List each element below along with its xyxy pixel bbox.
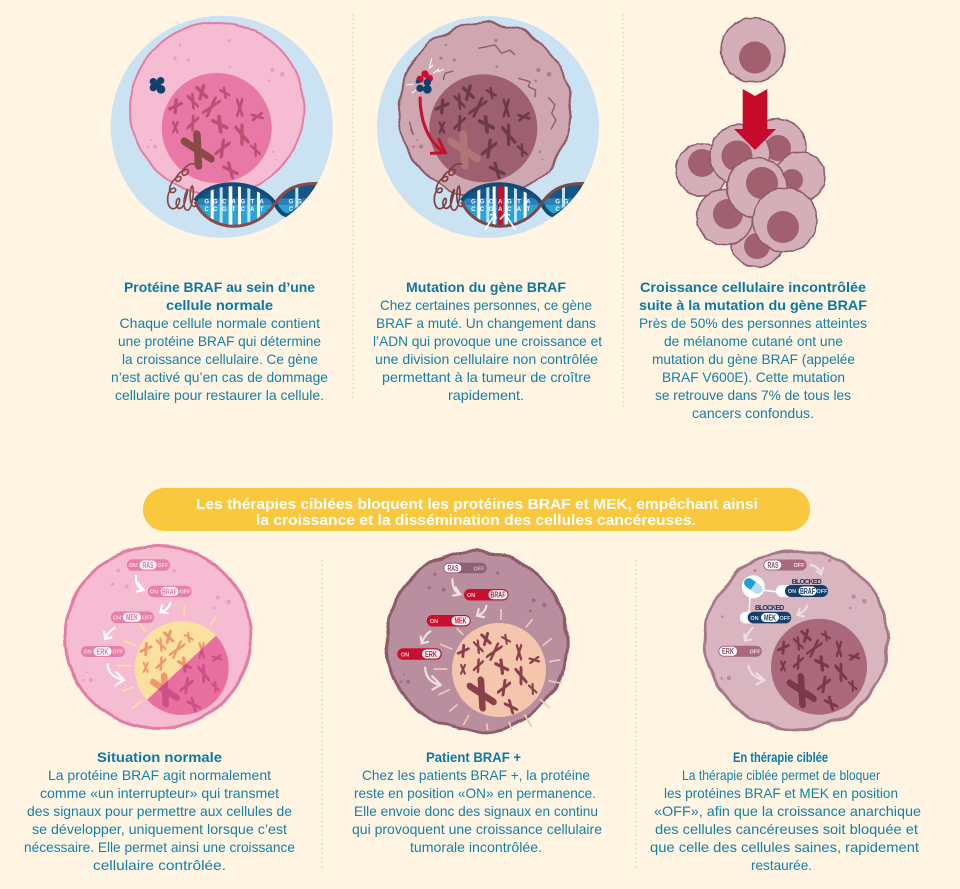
- DNA helix with mutation: C: [489, 200, 494, 206]
- text: targeted therapy: les protéines BRAF et MEK en position: [664, 785, 898, 801]
- DNA helix with mutation: G: [489, 207, 494, 213]
- DNA helix with mutation: G: [555, 200, 560, 206]
- text: uncontrolled growth: suite à la mutation du gène BRAF: [639, 297, 867, 313]
- toggle: MEK blocked: ON: [750, 616, 759, 622]
- toggle: MEK on: ON: [430, 619, 438, 625]
- cell body: [65, 546, 251, 728]
- text: BRAF gene mutation: [373, 279, 602, 403]
- DNA helix: A: [259, 200, 264, 206]
- text: uncontrolled growth: Croissance cellulaire incontrôlée: [640, 279, 866, 295]
- text: uncontrolled growth: Près de 50% des personnes atteintes: [639, 315, 867, 331]
- toggle: RAS: OFF: [158, 563, 169, 569]
- toggle: ERK on: ERK: [425, 650, 437, 659]
- toggle: RAS: [127, 559, 170, 571]
- mutated cell: [399, 23, 571, 197]
- toggle: BRAF on: ON: [467, 593, 475, 599]
- text: normal BRAF protein: cellule normale: [166, 297, 273, 313]
- text: normal BRAF protein: n’est activé qu’en cas de dommage: [111, 369, 328, 385]
- panel: BRAF mutation cell illustration: [377, 16, 599, 238]
- text: targeted therapy: des cellules cancéreuses soit bloquée et: [655, 821, 918, 837]
- toggle: ERK: ON: [83, 650, 92, 656]
- signal rays: [433, 609, 562, 730]
- text: BRAF positive patient: [352, 749, 602, 855]
- DNA helix with mutation: A: [498, 200, 503, 206]
- text: normal BRAF protein: Chaque cellule normale contient: [120, 315, 320, 331]
- text: uncontrolled growth: mutation du gène BRAF (appelée: [652, 351, 855, 367]
- cell body: [706, 550, 888, 730]
- toggle: ERK on: ON: [401, 652, 409, 658]
- panel: BRAF positive cell: [386, 552, 568, 732]
- toggle: BRAF on: BRAF: [490, 591, 506, 600]
- DNA helix: G: [222, 207, 227, 213]
- toggle: RAS off: RAS: [768, 561, 779, 570]
- mutated protein cluster: [407, 58, 444, 94]
- text: targeted therapy: que celle des cellules saines, rapidement: [650, 839, 919, 855]
- toggle: ERK: OFF: [112, 650, 124, 656]
- text: BRAF positive patient: qui provoquent une croissance cellulaire: [352, 821, 602, 837]
- toggle: ERK on: [397, 648, 442, 660]
- text: uncontrolled growth: [639, 279, 867, 421]
- toggle: MEK on: MEK: [454, 617, 467, 626]
- DNA helix: C: [213, 207, 218, 213]
- text: targeted therapy: «OFF», afin que la croissance anarchique: [654, 803, 921, 819]
- toggle: RAS off: [763, 560, 807, 570]
- DNA helix: T: [250, 200, 254, 206]
- toggle: MEK blocked: [740, 605, 791, 623]
- DNA helix: C: [204, 207, 209, 213]
- text: BRAF positive patient: tumorale incontrôlée.: [410, 839, 542, 855]
- panel: uncontrolled growth illustration: [676, 18, 825, 267]
- DNA coil: [168, 164, 196, 210]
- signal arrows: [104, 575, 171, 686]
- cytoplasm dots: [720, 559, 867, 680]
- toggle: MEK: ON: [113, 616, 121, 622]
- toggle: MEK blocked: MEK: [764, 614, 776, 623]
- text: BRAF gene mutation: permettant à la tumeur de croître: [382, 369, 591, 385]
- text: BRAF gene mutation: BRAF a muté. Un changement dans: [376, 315, 596, 331]
- text: targeted therapy: restaurée.: [751, 857, 812, 873]
- DNA helix: A: [250, 207, 255, 213]
- toggle: BRAF blocked: BLOCKED: [792, 579, 822, 586]
- toggle: BRAF blocked: BRAF: [800, 587, 815, 596]
- toggle: ERK off: ERK: [722, 647, 734, 656]
- DNA coil: [434, 164, 462, 210]
- toggle: BRAF blocked: [776, 579, 828, 597]
- text: normal situation: [24, 749, 295, 873]
- text: normal situation: Situation normale: [97, 749, 222, 765]
- DNA helix with mutation: C: [480, 207, 485, 213]
- DNA helix with mutation: G: [471, 200, 476, 206]
- DNA helix: G: [297, 200, 302, 206]
- cracks: [409, 45, 556, 135]
- toggle: RAS off: [443, 563, 487, 573]
- text: normal BRAF protein: Protéine BRAF au sein d’une: [124, 279, 315, 295]
- DNA helix: C: [222, 200, 227, 206]
- toggle: BRAF: [148, 586, 192, 597]
- DNA helix with mutation: C: [507, 207, 512, 213]
- toggle: RAS: RAS: [142, 561, 154, 570]
- text: normal situation: comme «un interrupteur» qui transmet: [40, 785, 279, 801]
- panel: normal BRAF cell illustration: [111, 16, 333, 238]
- DNA helix with mutation: C: [471, 207, 476, 213]
- text: BRAF gene mutation: Mutation du gène BRAF: [406, 279, 566, 295]
- text: normal situation: des signaux pour permettre aux cellules de: [27, 803, 292, 819]
- cytoplasm dots: [400, 571, 547, 684]
- DNA helix with mutation: G: [507, 200, 512, 206]
- DNA helix: T: [232, 207, 236, 213]
- DNA helix: T: [260, 207, 264, 213]
- toggle: MEK: OFF: [142, 616, 154, 622]
- toggle: BRAF on: [464, 589, 508, 600]
- toggle: ERK: [81, 646, 125, 657]
- single cell: [721, 18, 785, 82]
- normal cell: [130, 22, 304, 194]
- DNA helix with mutation: A: [526, 200, 531, 206]
- text: normal situation: nécessaire. Elle permet ainsi une croissance: [24, 839, 295, 855]
- DNA helix: G: [289, 200, 294, 206]
- BRAF protein cluster: [150, 77, 165, 94]
- toggle: ERK off: [718, 646, 762, 657]
- toggle: RAS off: OFF: [794, 563, 805, 569]
- toggle: ERK: ERK: [96, 648, 109, 656]
- text: BRAF positive patient: reste en position «ON» en permanence.: [354, 785, 596, 801]
- text: normal BRAF protein: la croissance cellulaire. Ce gène: [122, 351, 318, 367]
- toggle: MEK on: [427, 615, 471, 626]
- DNA helix with mutation: T: [526, 207, 530, 213]
- toggle: BRAF: ON: [150, 590, 158, 596]
- toggle: RAS off: OFF: [474, 566, 485, 572]
- DNA helix with mutation: G: [480, 200, 485, 206]
- text: normal situation: cellulaire contrôlée.: [93, 857, 226, 873]
- cell body: [386, 552, 568, 732]
- signal arrows: [744, 565, 823, 685]
- red arrow: [420, 97, 445, 153]
- panel: normal signalling cell: [65, 546, 251, 728]
- DNA helix with mutation: [460, 182, 585, 230]
- text: uncontrolled growth: se retrouve dans 7% de tous les: [655, 387, 851, 403]
- cytoplasm dots: [412, 39, 551, 160]
- toggle: ERK off: OFF: [750, 650, 761, 656]
- blue circle background: [111, 16, 333, 238]
- nucleus with chromosomes: [429, 74, 537, 182]
- toggle: MEK blocked: BLOCKED: [755, 605, 784, 612]
- DNA helix: G: [213, 200, 218, 206]
- text: normal situation: se développer, uniquement lorsque c’est: [32, 821, 287, 837]
- text: targeted therapy: En thérapie ciblée: [733, 749, 828, 765]
- text: normal BRAF protein: cellulaire pour restaurer la cellule.: [115, 387, 324, 403]
- signal rays: [117, 606, 216, 708]
- text: BRAF positive patient: Chez les patients BRAF +, la protéine: [362, 767, 590, 783]
- text: uncontrolled growth: BRAF V600E). Cette mutation: [662, 369, 845, 385]
- toggle: BRAF: OFF: [180, 590, 191, 596]
- DNA helix: G: [240, 200, 245, 206]
- text: targeted therapy: La thérapie ciblée permet de bloquer: [682, 767, 880, 783]
- text: normal situation: La protéine BRAF agit normalement: [48, 767, 271, 783]
- toggle: MEK blocked: OFF: [780, 616, 791, 622]
- toggle: RAS: ON: [129, 563, 137, 569]
- DNA helix with mutation: T: [517, 200, 521, 206]
- toggle: RAS off: RAS: [448, 564, 459, 573]
- banner: targeted therapies: [143, 488, 810, 531]
- icon: drug capsule: [742, 575, 779, 612]
- DNA helix: [194, 182, 318, 228]
- DNA helix with mutation: G: [564, 200, 569, 206]
- text: BRAF gene mutation: l’ADN qui provoque une croissance et: [373, 333, 602, 349]
- toggle: MEK: MEK: [126, 613, 138, 622]
- text: BRAF gene mutation: Chez certaines personnes, ce gène: [380, 297, 592, 313]
- text: uncontrolled growth: cancers confondus.: [692, 405, 814, 421]
- nucleus: [771, 619, 867, 715]
- nucleus with chromosomes: [162, 73, 272, 183]
- cell cluster front: [697, 158, 817, 252]
- DNA helix: G: [204, 200, 209, 206]
- toggle: BRAF blocked: OFF: [816, 589, 828, 595]
- DNA helix: C: [240, 207, 245, 213]
- cell cluster back: [676, 119, 825, 267]
- text: normal BRAF protein: une protéine BRAF qui détermine: [118, 333, 321, 349]
- panel: targeted therapy cell: [706, 550, 888, 730]
- DNA helix with mutation: C: [555, 207, 560, 213]
- red arrow: [734, 89, 776, 150]
- DNA helix: C: [289, 207, 294, 213]
- DNA helix with mutation: A: [517, 207, 522, 213]
- text: uncontrolled growth: de mélanome cutané ont une: [664, 333, 843, 349]
- text: BRAF positive patient: Patient BRAF +: [426, 749, 521, 765]
- DNA helix with mutation: A: [498, 207, 503, 213]
- signal arrows: [421, 578, 487, 690]
- cytoplasm dots: [146, 39, 285, 160]
- half-activated nucleus: [135, 621, 229, 715]
- banner: targeted therapies: Les thérapies ciblées bloquent les protéines BRAF et MEK, empêchant ainsi: [196, 497, 758, 513]
- toggle: MEK: [111, 612, 154, 623]
- text: BRAF gene mutation: rapidement.: [448, 387, 524, 403]
- cytoplasm dots: [82, 569, 231, 682]
- text: BRAF gene mutation: une division cellulaire non contrôlée: [375, 351, 598, 367]
- toggle: BRAF: BRAF: [162, 587, 177, 596]
- blue circle background: [377, 16, 599, 238]
- text: targeted therapy: [650, 749, 921, 873]
- text: normal BRAF protein: [111, 279, 328, 403]
- DNA helix: A: [231, 200, 236, 206]
- text: BRAF positive patient: Elle envoie donc des signaux en continu: [354, 803, 598, 819]
- banner: targeted therapies: la croissance et la dissémination des cellules cancéreuses.: [256, 513, 696, 529]
- nucleus: [452, 623, 546, 717]
- toggle: BRAF blocked: ON: [788, 589, 796, 595]
